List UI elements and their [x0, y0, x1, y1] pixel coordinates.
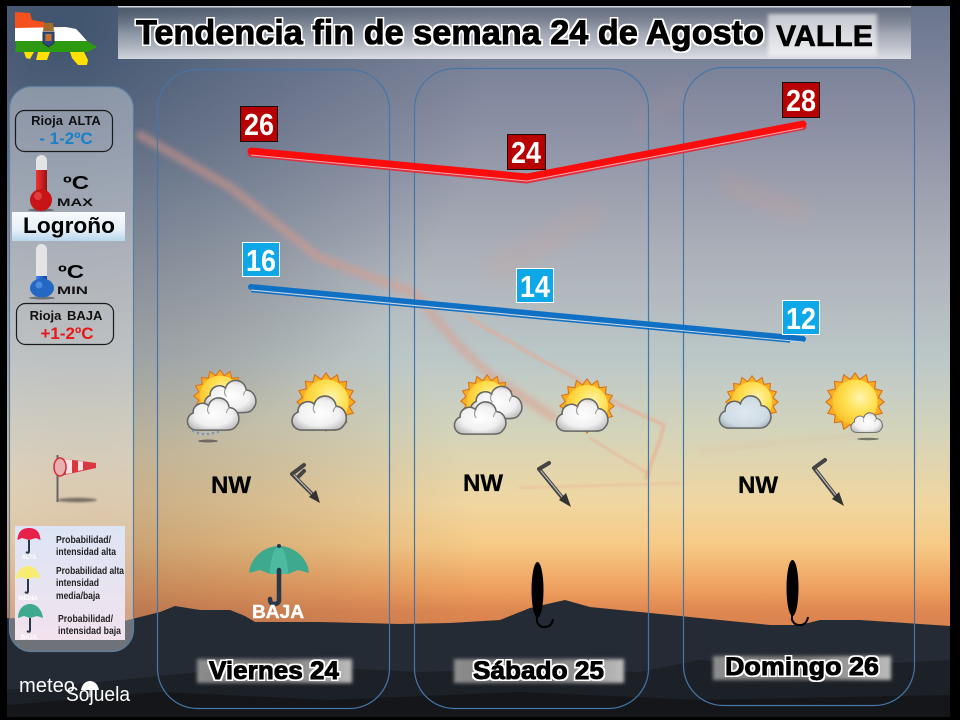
icon: wind barb Sábado: [539, 463, 571, 507]
icon: yellow umbrella: MEDIA: [18, 596, 38, 602]
legend text: alta: intensidad alta: [56, 547, 116, 558]
label: ºC min: ºC: [58, 262, 84, 282]
icon: Domingo sun and blue cloud: [719, 376, 778, 428]
Rioja ALTA box: [16, 110, 112, 152]
text: wind direction Sábado: NW: [463, 470, 503, 497]
Rioja ALTA box: Rioja ALTA: [31, 113, 101, 128]
icon: green umbrella: BAJA: [21, 635, 38, 641]
icon: thermometer max: [28, 155, 54, 212]
legend text: alta: Probabilidad/: [56, 535, 111, 546]
legend text: media: Probabilidad alta: [56, 566, 124, 577]
Rioja ALTA box: - 1-2ºC: [39, 129, 93, 148]
icon: windsock: [54, 455, 97, 502]
logo: meteo Sojuela: meteo: [19, 675, 75, 697]
legend text: baja: [58, 614, 121, 637]
panel: left sidebar: [10, 86, 134, 652]
value 16: 16: [246, 243, 276, 278]
title bar: [118, 6, 911, 59]
label: ºC max: MAX: [57, 197, 94, 209]
value 14: 14: [520, 269, 551, 304]
label: Domingo 26: Domingo 26: [725, 653, 879, 681]
logo: La Rioja flag map: [15, 12, 97, 65]
text: wind direction Domingo: NW: [738, 472, 778, 499]
value 26: 26: [244, 107, 274, 142]
legend text: media: [56, 566, 124, 602]
icon: red umbrella: ALTA: [21, 555, 37, 561]
logo: meteo Sojuela: Sojuela: [66, 684, 131, 706]
panel: Domingo: [684, 68, 914, 706]
label: Viernes 24: Viernes 24: [209, 657, 339, 685]
value 28: 28: [786, 83, 816, 118]
Rioja BAJA box: [16, 304, 114, 344]
logo: meteo Sojuela: [19, 675, 131, 706]
panel: Sábado: [414, 68, 648, 708]
icon: Viernes sun, clouds and drizzle: [187, 370, 256, 442]
chart: max temperature line: [240, 82, 820, 181]
value 24: 24: [511, 135, 542, 170]
label: ºC max: ºC: [63, 173, 89, 193]
icon: closed umbrella Sábado: [532, 562, 553, 627]
icon: Domingo sun with small cloud: [826, 373, 884, 440]
legend text: alta: [56, 535, 116, 558]
Rioja BAJA box: +1-2ºC: [41, 324, 93, 343]
legend text: media: intensidad: [56, 578, 99, 589]
title text: Tendencia fin de semana 24 de Agosto: [136, 14, 764, 52]
label: ºC max: [57, 173, 94, 209]
icon: thermometer min: [29, 244, 55, 300]
icon: Sábado sun and cloud: [556, 379, 614, 433]
label: Sábado 25: Sábado 25: [473, 657, 604, 685]
legend text: media: media/baja: [56, 591, 100, 602]
legend text: baja: intensidad baja: [58, 626, 121, 637]
Logroño label: Logroño: [23, 213, 115, 238]
text: BAJA: BAJA: [252, 602, 304, 622]
icon: Sábado sun and clouds: [454, 375, 522, 434]
VALLE label: VALLE: [776, 20, 873, 53]
icon: wind barb Viernes: [292, 465, 320, 503]
highlight box behind VALLE: [768, 14, 877, 56]
Logroño label: [12, 212, 125, 241]
Rioja BAJA box: Rioja BAJA: [30, 308, 103, 323]
coat of arms: [43, 23, 54, 47]
chart: min temperature line: [242, 242, 820, 342]
icon: closed umbrella Domingo: [786, 560, 808, 625]
text: wind direction Viernes: NW: [211, 472, 251, 499]
label: ºC min: [57, 262, 88, 297]
icon: green umbrella BAJA: [249, 544, 309, 622]
panel: Viernes: [158, 70, 390, 708]
icon: Viernes sun and cloud: [292, 373, 355, 431]
legend: umbrella probability: [15, 526, 125, 641]
value 12: 12: [786, 301, 816, 336]
icon: wind barb Domingo: [814, 460, 844, 506]
label: ºC min: MIN: [57, 285, 88, 297]
legend text: baja: Probabilidad/: [58, 614, 113, 625]
